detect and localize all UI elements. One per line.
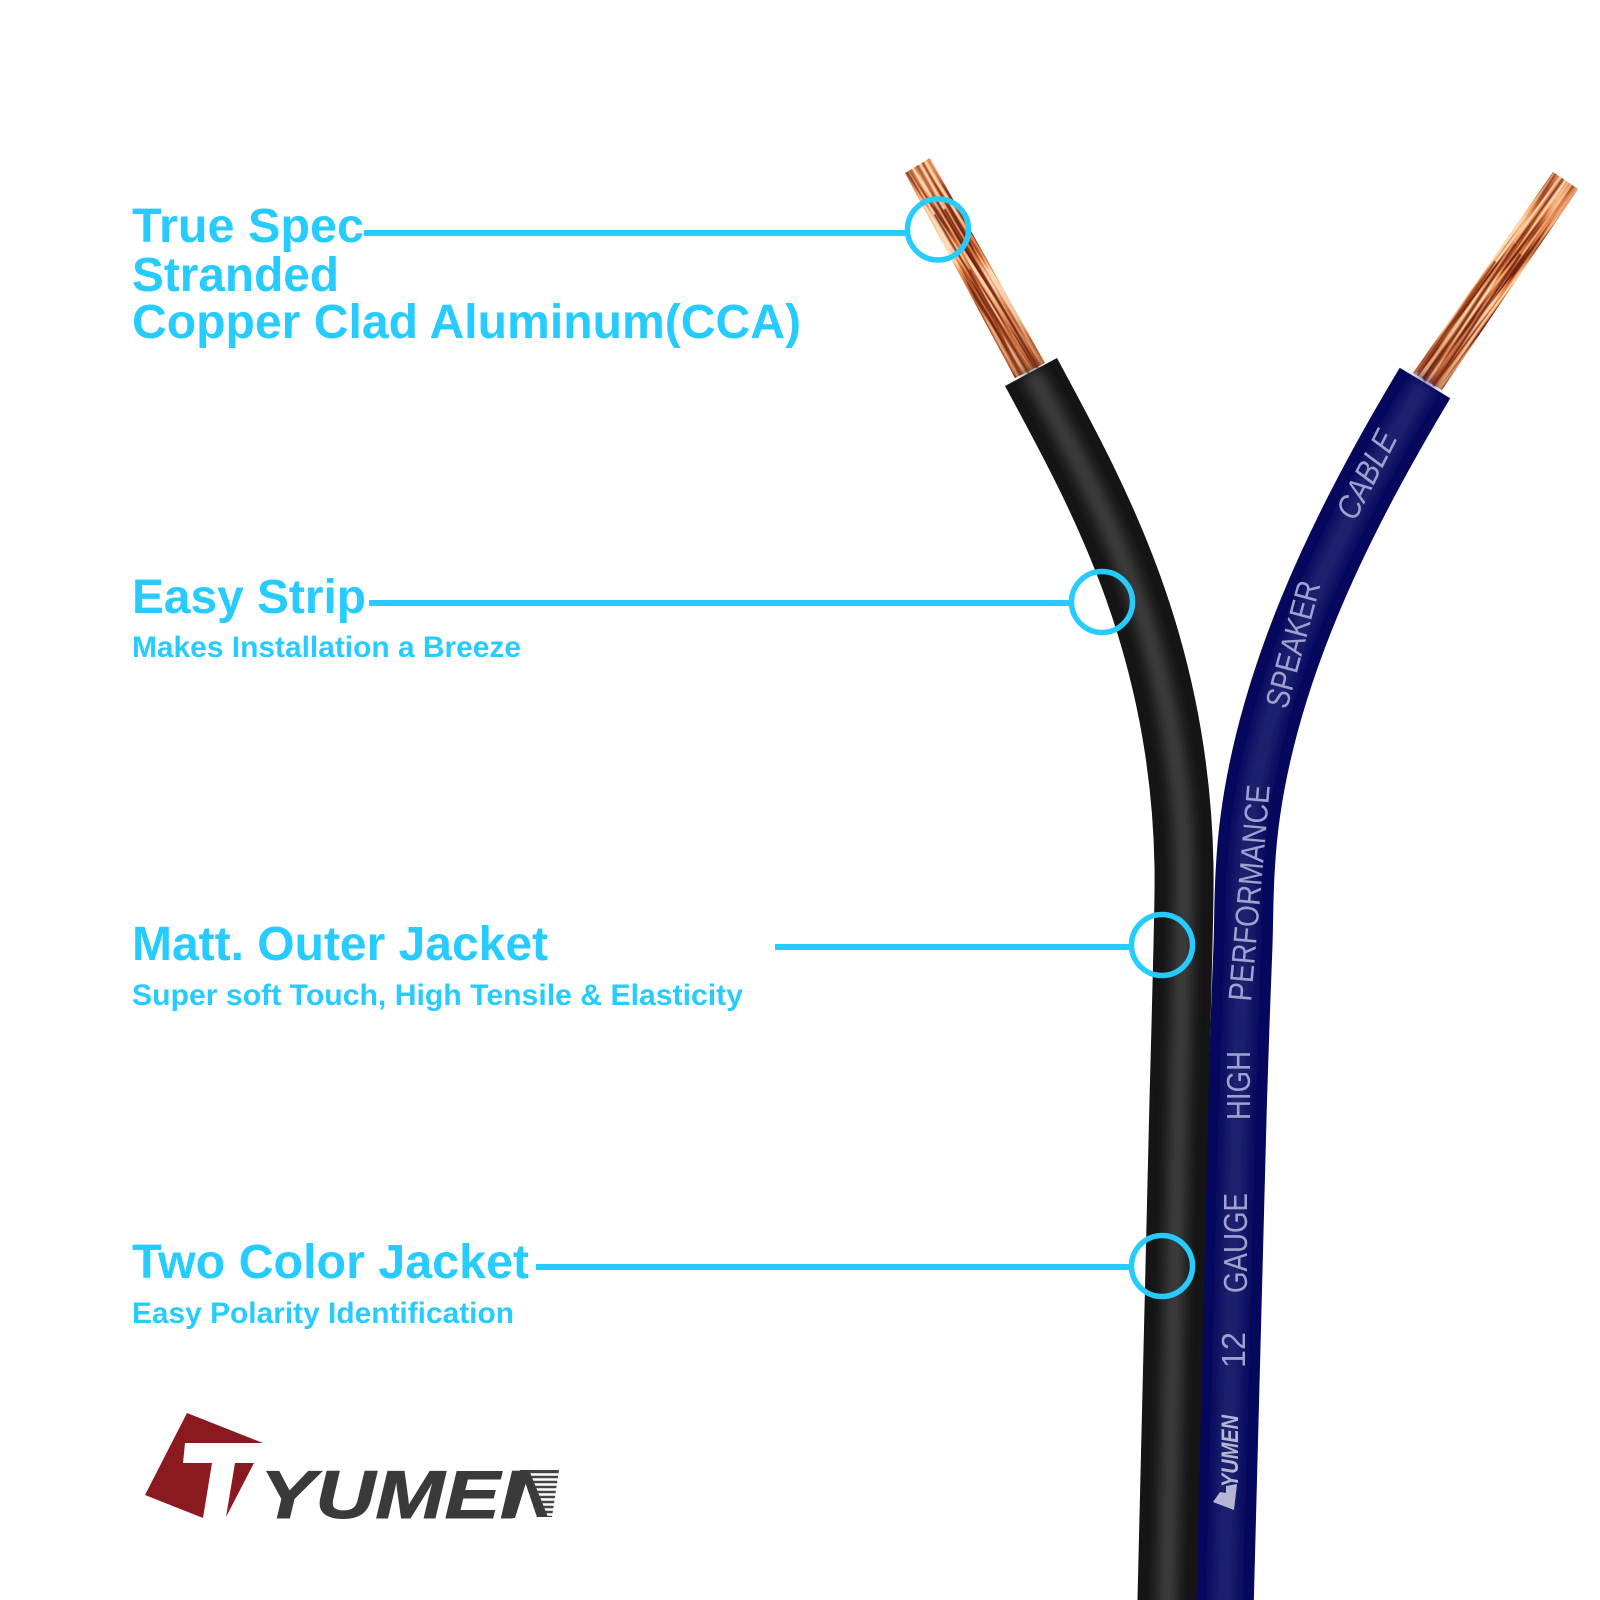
cable print text <box>1213 423 1405 1510</box>
cable: black jacket <box>1031 372 1184 1600</box>
cable print text: PERFORMANCE <box>1221 783 1277 1003</box>
callout: two color jacket: Easy Polarity Identification <box>132 1297 514 1330</box>
cable print text: 12 <box>1215 1332 1252 1368</box>
cable print text: CABLE <box>1328 423 1405 525</box>
logo: Tyumen: YUMEN <box>260 1457 562 1533</box>
callout: true spec stranded copper: Stranded <box>132 249 339 302</box>
callout: easy strip: Makes Installation a Breeze <box>132 631 521 664</box>
callout: true spec stranded copper <box>132 199 968 349</box>
cable print text: HIGH <box>1220 1051 1257 1120</box>
wire: right copper strands <box>1413 172 1578 390</box>
cable print text: YUMEN <box>1217 1414 1244 1487</box>
logo: Tyumen <box>145 1413 559 1519</box>
callout: matt outer jacket <box>132 914 1192 1012</box>
callout: true spec stranded copper: Copper Clad Aluminum(CCA) <box>132 296 801 349</box>
callout: two color jacket <box>132 1236 1192 1330</box>
callout: matt outer jacket: Super soft Touch, High Tensile & Elasticity <box>132 979 743 1012</box>
cable print text: GAUGE <box>1217 1193 1254 1293</box>
callout: easy strip: Easy Strip <box>132 571 366 624</box>
cable print text: SPEAKER <box>1258 577 1327 712</box>
cable: blue jacket <box>1224 383 1425 1600</box>
callout: easy strip <box>132 571 1132 664</box>
callout: two color jacket: Two Color Jacket <box>132 1236 529 1289</box>
wire: left copper strands <box>905 158 1045 378</box>
callout: true spec stranded copper: True Spec <box>132 200 364 253</box>
callout: matt outer jacket: Matt. Outer Jacket <box>132 918 548 971</box>
